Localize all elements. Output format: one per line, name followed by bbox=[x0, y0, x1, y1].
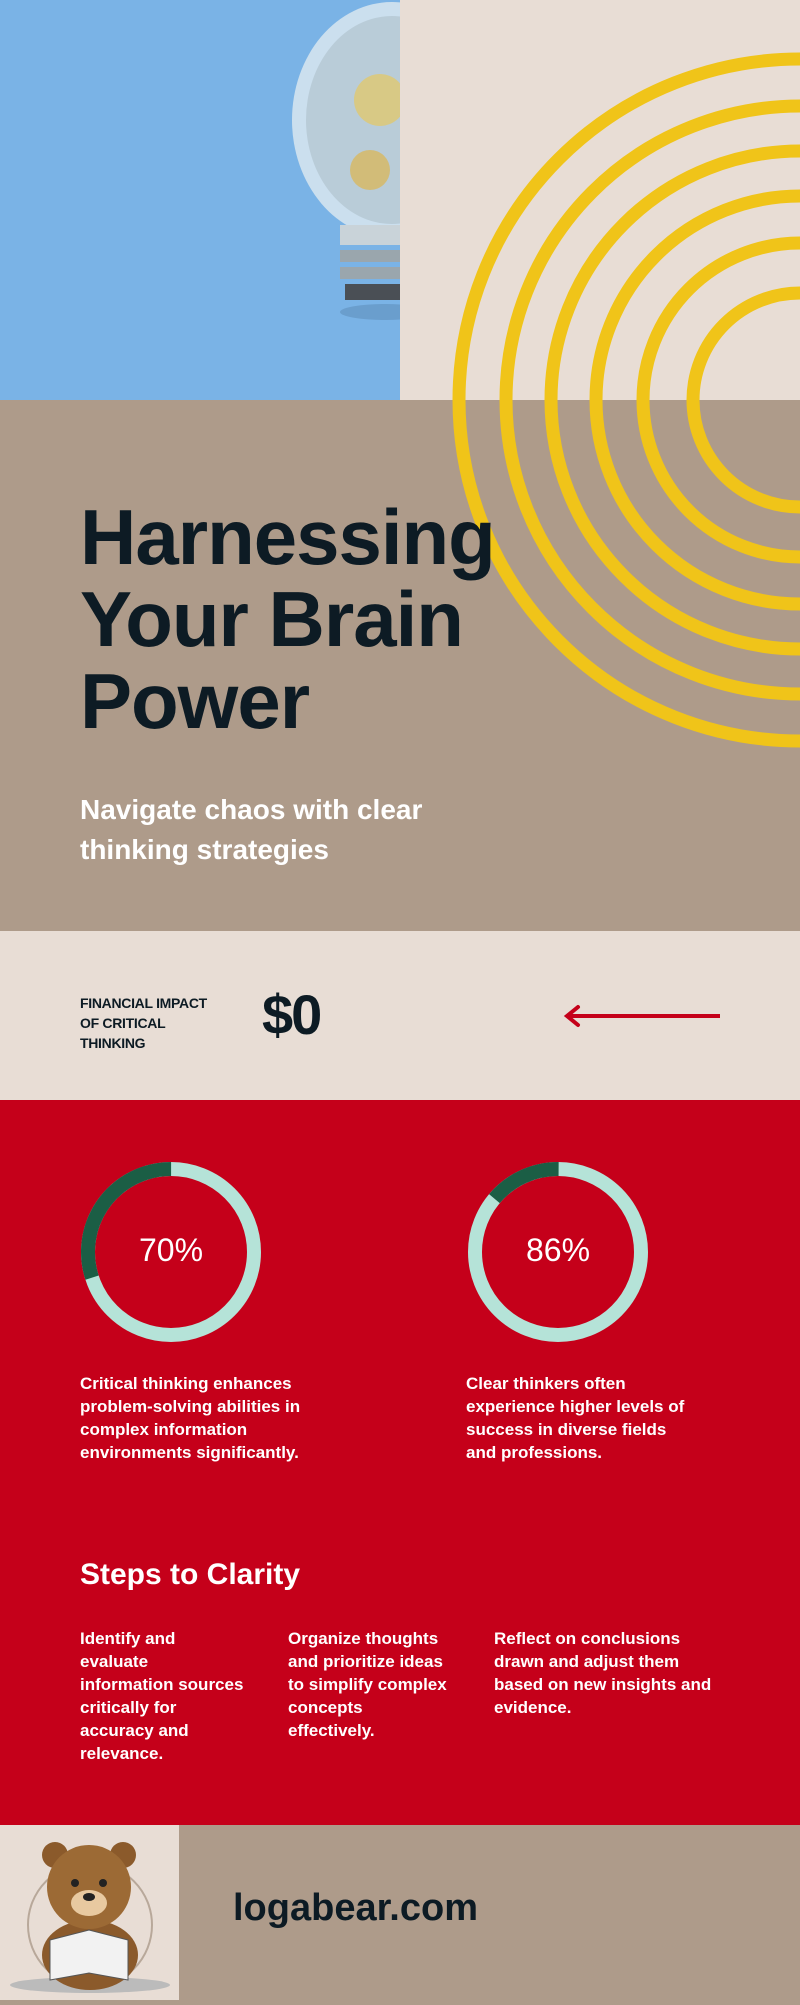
website: logabear.com bbox=[233, 1887, 478, 1929]
text: stat 1 description: complex information bbox=[80, 1420, 247, 1439]
panel: red stats bbox=[0, 1100, 800, 1825]
panel: title area bbox=[0, 400, 800, 931]
donut chart 70% bbox=[81, 1162, 261, 1342]
donut chart 86% bbox=[468, 1162, 648, 1342]
text: stat 1 description: environments significantly. bbox=[80, 1443, 299, 1462]
text: stat 2 description: success in diverse fields bbox=[466, 1420, 666, 1439]
heading: steps to clarity: Steps to Clarity bbox=[80, 1558, 300, 1591]
text: stat 1 description: Critical thinking enhances bbox=[80, 1374, 292, 1393]
step 3: based on new insights and bbox=[494, 1675, 711, 1694]
panel: top blue photo bbox=[0, 0, 400, 400]
step 2: and prioritize ideas bbox=[288, 1652, 443, 1671]
text: stat 2 description: and professions. bbox=[466, 1443, 602, 1462]
step 2: concepts bbox=[288, 1698, 363, 1717]
stat label: FINANCIAL IMPACT bbox=[80, 995, 207, 1011]
subtitle: Navigate chaos with clear bbox=[80, 794, 422, 825]
step 2: to simplify complex bbox=[288, 1675, 447, 1694]
step 1: evaluate bbox=[80, 1652, 148, 1671]
stat label: THINKING bbox=[80, 1035, 145, 1051]
step 1: critically for bbox=[80, 1698, 176, 1717]
text: stat 2 description: experience higher levels of bbox=[466, 1397, 684, 1416]
panel: financial impact stat bbox=[0, 931, 800, 1100]
step 3: Reflect on conclusions bbox=[494, 1629, 680, 1648]
text: stat 1 description bbox=[80, 1374, 300, 1462]
donut chart 70%: 70% bbox=[139, 1232, 203, 1268]
icon: light bulb bbox=[292, 2, 400, 320]
title: Harnessing bbox=[80, 493, 495, 581]
step 2 bbox=[288, 1629, 447, 1740]
icon: bear reading bbox=[0, 1825, 179, 2000]
text: stat 1 description: problem-solving abilities in bbox=[80, 1397, 300, 1416]
step 2: Organize thoughts bbox=[288, 1629, 438, 1648]
title bbox=[80, 493, 495, 745]
subtitle: thinking strategies bbox=[80, 834, 329, 865]
step 1: Identify and bbox=[80, 1629, 175, 1648]
step 3: evidence. bbox=[494, 1698, 572, 1717]
footer bbox=[0, 1825, 800, 2000]
step 1: accuracy and bbox=[80, 1721, 189, 1740]
step 1: relevance. bbox=[80, 1744, 163, 1763]
title: Your Brain bbox=[80, 575, 463, 663]
text: stat 2 description: Clear thinkers often bbox=[466, 1374, 626, 1393]
step 2: effectively. bbox=[288, 1721, 375, 1740]
step 3: drawn and adjust them bbox=[494, 1652, 679, 1671]
stat label: OF CRITICAL bbox=[80, 1015, 165, 1031]
donut chart 86%: 86% bbox=[526, 1232, 590, 1268]
stat label bbox=[80, 995, 208, 1051]
step 3 bbox=[494, 1629, 711, 1717]
subtitle bbox=[80, 794, 422, 865]
text: stat 2 description bbox=[466, 1374, 684, 1462]
arrow bbox=[564, 1004, 720, 1028]
decoration: yellow concentric rings bbox=[452, 52, 800, 748]
step 1 bbox=[80, 1629, 243, 1763]
panel: top right beige bbox=[400, 0, 800, 400]
step 1: information sources bbox=[80, 1675, 243, 1694]
title: Power bbox=[80, 657, 309, 745]
stat value: $0 bbox=[262, 983, 320, 1046]
